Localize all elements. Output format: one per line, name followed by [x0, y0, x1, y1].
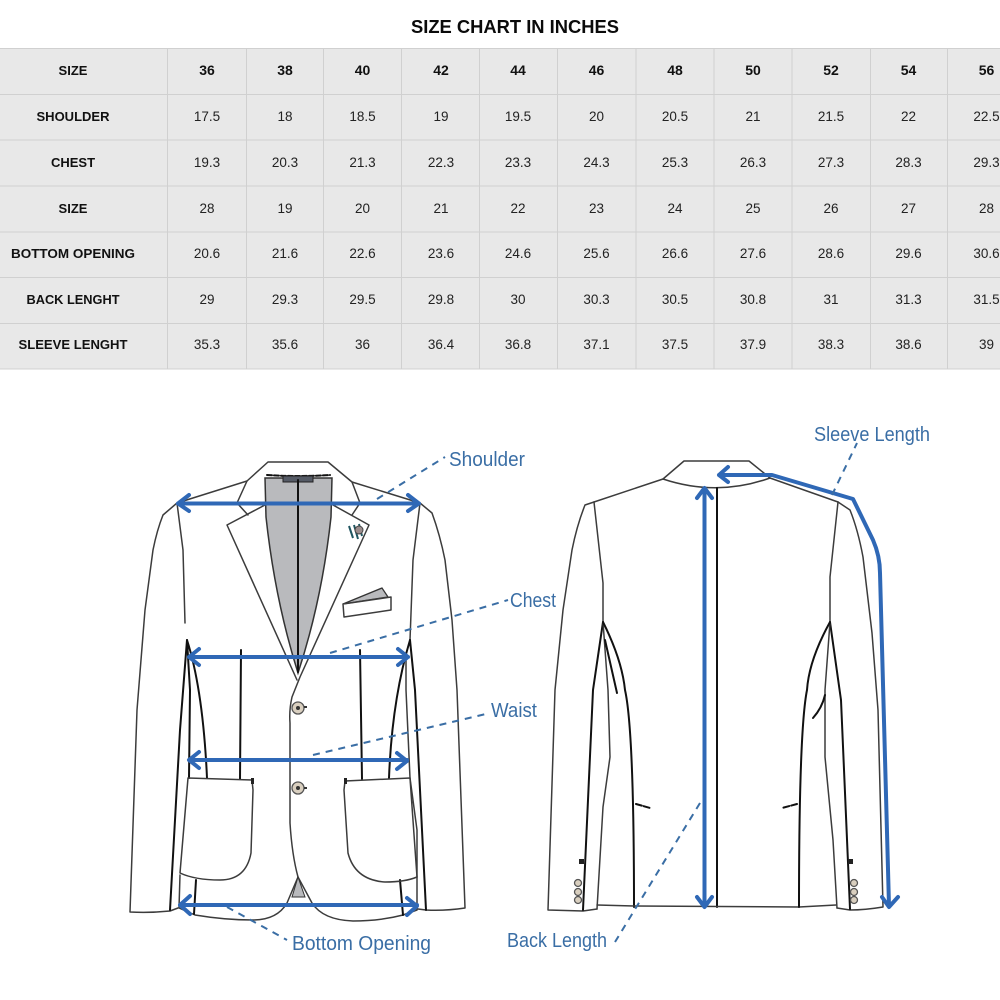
row: chest: 19.3 [194, 155, 220, 170]
back right sleeve [830, 502, 838, 622]
row: back length: 29.5 [349, 292, 376, 307]
row: size: 23 [589, 201, 604, 216]
sleeve length measure arrow [719, 467, 898, 907]
row: sleeve length: 35.3 [194, 337, 220, 352]
shoulder leader line [377, 457, 445, 499]
row: size: 20 [355, 201, 370, 216]
row: size header: 36 [199, 62, 215, 78]
row: chest: 27.3 [818, 155, 844, 170]
row: size: 19 [277, 201, 293, 216]
row: size header: 48 [667, 62, 683, 78]
row: back length: 30.3 [583, 292, 610, 307]
row: back length: 29 [199, 292, 215, 307]
row: size: 28 [199, 201, 215, 216]
row: shoulder: 21.5 [818, 109, 844, 124]
back length leader line [615, 803, 700, 942]
row: bottom opening: 28.6 [818, 246, 844, 261]
row: size header: 42 [433, 62, 449, 78]
row: sleeve length: 39 [979, 337, 994, 352]
row: size header: 44 [510, 62, 526, 78]
waist label: Waist [491, 700, 537, 722]
title: SIZE CHART IN INCHES [411, 17, 619, 37]
shoulder measure arrow [178, 495, 419, 511]
row: back length: 29.3 [272, 292, 298, 307]
pocket square [343, 588, 391, 617]
right sleeve [418, 503, 465, 910]
row: chest: 26.3 [740, 155, 766, 170]
back length measure arrow [697, 488, 712, 907]
row: size: 22 [510, 201, 526, 216]
row: size: 28 [979, 201, 994, 216]
lining [265, 478, 332, 673]
row: size: 21 [433, 201, 449, 216]
row: bottom opening: 25.6 [583, 246, 610, 261]
row: size header: 46 [589, 62, 604, 78]
chest label: Chest [510, 590, 556, 612]
row: bottom opening: 24.6 [505, 246, 531, 261]
row: chest: 28.3 [895, 155, 922, 170]
row: chest: 25.3 [662, 155, 688, 170]
left sleeve [130, 503, 178, 912]
row: shoulder: SHOULDER [37, 109, 110, 124]
row: chest [51, 155, 1000, 170]
lapel pin [349, 524, 363, 539]
row: sleeve length: 36 [355, 337, 370, 352]
row: sleeve length: 38.6 [895, 337, 922, 352]
row: bottom opening: 21.6 [272, 246, 298, 261]
row: sleeve length [18, 337, 994, 352]
row: sleeve length: 37.1 [583, 337, 610, 352]
back center seam [716, 488, 718, 907]
row: size: 27 [901, 201, 916, 216]
bottom opening measure arrow [180, 896, 417, 915]
back hem [597, 905, 836, 907]
row: chest: 21.3 [349, 155, 376, 170]
row: size header: 56 [979, 62, 994, 78]
row: sleeve length: 36.8 [505, 337, 531, 352]
back jacket drawing [548, 461, 883, 911]
row: shoulder: 18.5 [349, 109, 376, 124]
row: size [59, 201, 994, 216]
waist leader line [313, 713, 490, 755]
right cuff buttons [848, 859, 858, 904]
row: sleeve length: SLEEVE LENGHT [18, 337, 128, 352]
row: shoulder: 21 [745, 109, 761, 124]
row: size header: 38 [277, 62, 293, 78]
row: size: 26 [823, 201, 839, 216]
shoulder label: Shoulder [449, 449, 525, 471]
row: shoulder: 18 [277, 109, 293, 124]
row: shoulder: 17.5 [194, 109, 220, 124]
row: sleeve length: 37.5 [662, 337, 688, 352]
row: sleeve length: 36.4 [428, 337, 455, 352]
row: back length: 30.8 [740, 292, 766, 307]
row: size header: 50 [745, 62, 761, 78]
row: bottom opening: BOTTOM OPENING [11, 246, 135, 261]
row: back length: 29.8 [428, 292, 454, 307]
row: shoulder: 20.5 [662, 109, 688, 124]
row: shoulder: 20 [589, 109, 604, 124]
row: bottom opening: 22.6 [349, 246, 376, 261]
row: back length: BACK LENGHT [26, 292, 120, 307]
back collar [663, 461, 770, 488]
row: back length: 30 [510, 292, 526, 307]
row: bottom opening [11, 246, 1000, 261]
row: shoulder [37, 109, 1000, 124]
back shoulders [594, 478, 838, 502]
back left sleeve [548, 502, 597, 911]
bottom opening label: Bottom Opening [292, 933, 431, 955]
back length label: Back Length [507, 930, 607, 952]
body seams [187, 640, 207, 778]
row: bottom opening: 20.6 [194, 246, 220, 261]
bottom opening leader line [227, 907, 287, 940]
row: size: SIZE [59, 201, 88, 216]
row: back length: 31 [823, 292, 839, 307]
vent marks [636, 804, 797, 808]
row: shoulder: 19 [433, 109, 449, 124]
row: chest: 22.3 [428, 155, 454, 170]
row: shoulder: 22.5 [973, 109, 1000, 124]
chest leader line [330, 600, 508, 653]
button bottom [292, 782, 307, 794]
left cuff buttons [574, 859, 584, 904]
row: size: 25 [745, 201, 761, 216]
row: chest: 24.3 [583, 155, 610, 170]
right pocket [344, 778, 417, 882]
button top [292, 702, 307, 714]
row: back length: 30.5 [662, 292, 688, 307]
row: bottom opening: 23.6 [428, 246, 454, 261]
row: chest: CHEST [51, 155, 95, 170]
row: shoulder: 22 [901, 109, 916, 124]
sleeve length leader line [832, 443, 857, 495]
row: sleeve length: 37.9 [740, 337, 766, 352]
row: sleeve length: 35.6 [272, 337, 298, 352]
row: bottom opening: 27.6 [740, 246, 766, 261]
row: back length: 31.5 [973, 292, 1000, 307]
collar and shoulders [177, 462, 420, 503]
row: chest: 20.3 [272, 155, 298, 170]
row: size header: 54 [901, 62, 916, 78]
front jacket drawing [130, 462, 465, 921]
row: size: 24 [667, 201, 683, 216]
row: back length [26, 292, 1000, 307]
waist measure arrow [189, 752, 407, 769]
row: bottom opening: 26.6 [662, 246, 688, 261]
row: size header: 40 [355, 62, 370, 78]
sleeve length label: Sleeve Length [814, 424, 930, 446]
row: sleeve length: 38.3 [818, 337, 844, 352]
lapels [227, 505, 297, 680]
size chart table [0, 48, 1000, 369]
row: size header: 52 [823, 62, 839, 78]
row: bottom opening: 29.6 [895, 246, 922, 261]
row: back length: 31.3 [895, 292, 922, 307]
row: chest: 29.3 [973, 155, 1000, 170]
left pocket [180, 778, 253, 880]
chest measure arrow [189, 649, 408, 665]
row: size header: SIZE [59, 63, 88, 78]
row: chest: 23.3 [505, 155, 531, 170]
row: size header [59, 62, 994, 78]
row: bottom opening: 30.6 [973, 246, 1000, 261]
row: shoulder: 19.5 [505, 109, 531, 124]
